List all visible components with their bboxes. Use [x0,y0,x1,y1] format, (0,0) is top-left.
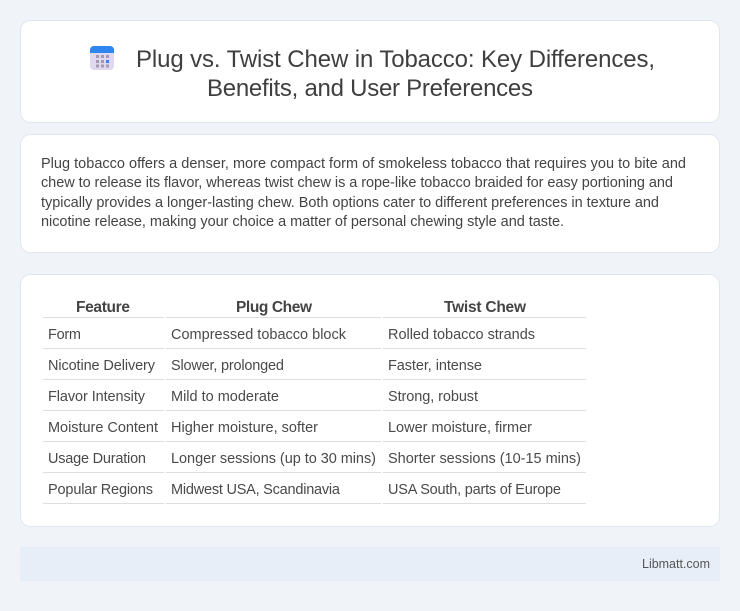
table header [76,299,527,316]
row: form: Compressed tobacco block [171,327,347,343]
panel: header [20,20,720,122]
row: popular regions: Midwest USA, Scandinavia [171,482,341,498]
row: moisture content: Lower moisture, firmer [388,420,532,436]
title: Benefits, and User Preferences [207,75,533,102]
footer text: Libmatt.com [642,557,710,571]
text block: intro paragraph: typically provides a longer-lasting chew. Both options cater to different preferences in texture and [41,195,659,211]
row: popular regions: USA South, parts of Europe [388,482,561,498]
table header: Plug Chew [236,299,313,316]
text block: intro paragraph: chew to release its flavor, whereas twist chew is a rope-like tobacco braided for easy portioning and [41,175,673,191]
text block: intro paragraph: nicotine release, making your choice a matter of personal chewing style and taste. [41,214,564,230]
row: flavor intensity: Flavor Intensity [48,389,146,405]
title: Plug vs. Twist Chew in Tobacco: Key Differences, [136,46,655,73]
row: popular regions: Popular Regions [48,482,153,498]
row: flavor intensity: Strong, robust [388,389,478,405]
panel: comparison table [20,274,720,526]
row: flavor intensity [48,389,478,405]
text block: intro paragraph [41,156,686,230]
row: form [48,327,535,343]
row: usage duration [48,451,581,467]
row: usage duration: Longer sessions (up to 30 mins) [171,451,376,467]
row: moisture content: Moisture Content [48,420,158,436]
title [136,46,655,102]
row: form: Form [48,327,81,343]
row: nicotine delivery [48,358,482,374]
table header: Twist Chew [444,299,527,316]
row: usage duration: Usage Duration [48,451,146,467]
table header: Feature [76,299,130,316]
text block: intro paragraph: Plug tobacco offers a denser, more compact form of smokeless tobacco that requires you to bite and [41,156,686,172]
icon: calendar [90,46,114,70]
row: popular regions [48,482,561,498]
panel: intro [20,134,720,252]
row: usage duration: Shorter sessions (10-15 mins) [388,451,581,467]
row: nicotine delivery: Faster, intense [388,358,482,374]
row: moisture content [48,420,532,436]
row: flavor intensity: Mild to moderate [171,389,279,405]
row: form: Rolled tobacco strands [388,327,535,343]
row: nicotine delivery: Nicotine Delivery [48,358,156,374]
footer [20,547,720,581]
row: moisture content: Higher moisture, softer [171,420,318,436]
row: nicotine delivery: Slower, prolonged [171,358,284,374]
